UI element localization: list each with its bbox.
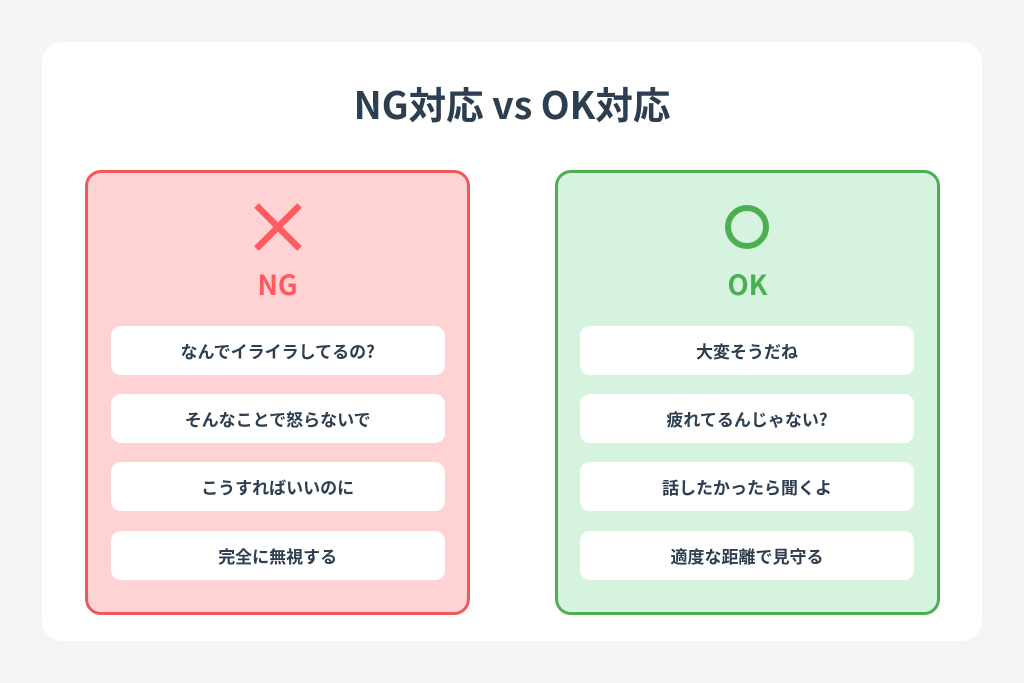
NG item 3 <box>111 462 445 511</box>
NG item 2 <box>111 394 445 443</box>
NG heading: NG <box>257 262 298 302</box>
OK item 4 <box>580 531 914 580</box>
NG item 4: 完全に無視する <box>218 543 337 568</box>
OK item 1: 大変そうだね <box>696 338 798 363</box>
icon: green circle <box>725 205 769 249</box>
OK item 3: 話したかったら聞くよ <box>662 474 832 499</box>
OK item 2: 疲れてるんじゃない? <box>666 406 828 431</box>
icon: red cross <box>254 203 302 251</box>
panel: OK <box>555 170 940 615</box>
OK item 4: 適度な距離で見守る <box>670 543 824 568</box>
NG item 4 <box>111 531 445 580</box>
NG item 1: なんでイライラしてるの? <box>180 338 375 363</box>
OK item 2 <box>580 394 914 443</box>
NG item 1 <box>111 326 445 375</box>
panel: NG <box>85 170 470 615</box>
OK heading: OK <box>727 262 768 302</box>
NG item 3: こうすればいいのに <box>201 474 354 499</box>
OK item 3 <box>580 462 914 511</box>
OK item 1 <box>580 326 914 375</box>
title: NG対応 vs OK対応 <box>354 75 670 130</box>
NG item 2: そんなことで怒らないで <box>185 406 371 431</box>
